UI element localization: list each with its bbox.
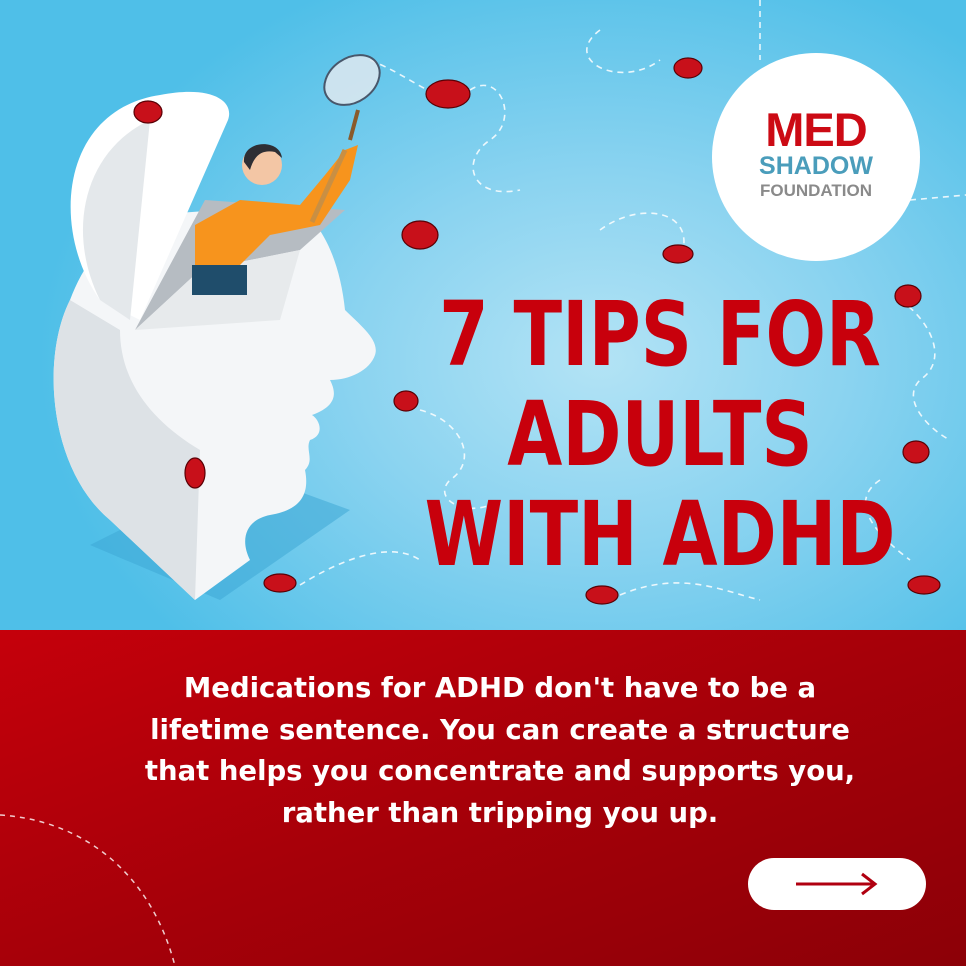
head shadow (90, 470, 350, 600)
title: ADULTS (507, 382, 813, 486)
logo: MED (765, 103, 867, 156)
body text: Medications for ADHD don't have to be a (184, 672, 816, 704)
panel: red intro (0, 630, 966, 966)
title: 7 TIPS FOR (439, 282, 881, 386)
title: WITH ADHD (425, 482, 895, 586)
body text: lifetime sentence. You can create a structure (150, 714, 850, 746)
body text: that helps you concentrate and supports you, (145, 755, 855, 787)
button with arrow (748, 858, 926, 910)
person (192, 45, 389, 295)
illustration: open head with person catching bugs (54, 54, 381, 600)
head body (54, 205, 376, 600)
opening (135, 200, 345, 330)
logo: FOUNDATION (760, 181, 872, 200)
logo: SHADOW (759, 152, 873, 180)
lid (71, 92, 229, 320)
logo (712, 53, 920, 261)
body text (145, 672, 855, 828)
body text: rather than tripping you up. (282, 796, 718, 828)
title (425, 282, 895, 586)
